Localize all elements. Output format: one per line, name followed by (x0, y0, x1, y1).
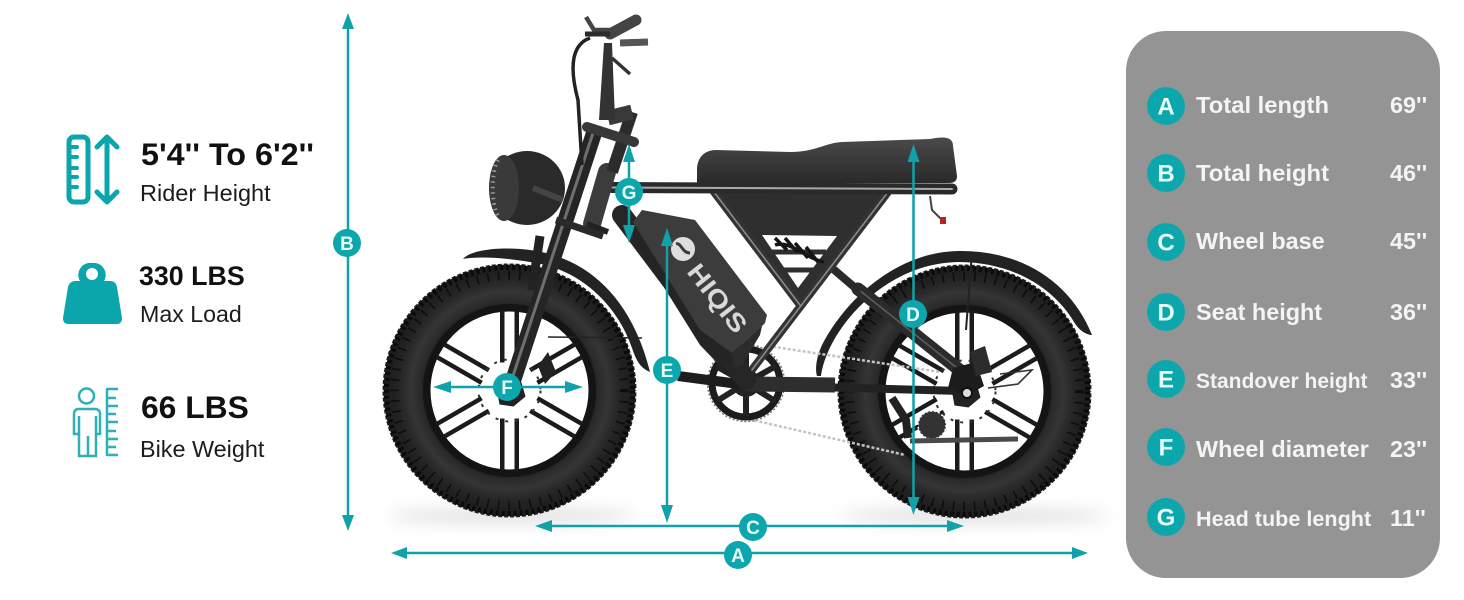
dimension E: standover height: E (661, 361, 673, 382)
row G: head tube length: Head tube lenght (1196, 506, 1371, 531)
rear fender (816, 251, 1092, 376)
fender stay (966, 252, 972, 330)
row F: wheel diameter: Wheel diameter (1196, 436, 1369, 462)
crank arm and pedal (678, 376, 746, 385)
row A: total length: Total length (1196, 92, 1329, 118)
battery brand text: HIQIS (681, 258, 753, 339)
dimension C: wheel base (535, 513, 964, 541)
row C: wheel base: C (1157, 230, 1175, 256)
dimension A: total length (391, 541, 1088, 569)
row D: seat height: Seat height (1196, 299, 1322, 325)
row G: head tube length: 11'' (1390, 505, 1426, 531)
row D: seat height: 36'' (1390, 299, 1427, 325)
row C: wheel base (1147, 223, 1427, 261)
bike weight value: 66 LBS (141, 389, 249, 425)
row B: total height: 46'' (1390, 160, 1427, 186)
row E: standover height: E (1158, 366, 1174, 394)
icon: ruler with arrows (69, 137, 117, 202)
front fender (463, 248, 650, 372)
front wheel (383, 264, 636, 517)
frame tubes (612, 188, 952, 380)
left spec: rider height (69, 136, 314, 206)
row A: total length (1147, 87, 1427, 125)
row D: seat height: D (1157, 300, 1175, 326)
left spec: max load (63, 261, 245, 327)
row C: wheel base: 45'' (1390, 228, 1427, 254)
row F: wheel diameter (1147, 428, 1427, 466)
row D: seat height (1147, 293, 1427, 331)
dimension C: wheel base: C (746, 518, 760, 539)
max load label: Max Load (140, 301, 242, 327)
row C: wheel base: Wheel base (1196, 228, 1325, 254)
battery logo (671, 237, 695, 261)
chainring (708, 344, 784, 422)
headlight (489, 151, 565, 225)
fork (509, 112, 642, 390)
row G: head tube length (1147, 498, 1426, 536)
rider height label: Rider Height (140, 180, 271, 206)
dimension D: seat height: D (906, 305, 920, 326)
row G: head tube length: G (1157, 504, 1175, 532)
row E: standover height: Standover height (1196, 370, 1368, 393)
left spec: bike weight (74, 388, 265, 462)
head tube (587, 172, 608, 232)
dimension G: head tube length (615, 144, 643, 243)
drivetrain and kickstand (892, 346, 1032, 441)
battery (625, 210, 767, 368)
row B: total height (1147, 154, 1427, 192)
dimension E: standover height (653, 228, 681, 523)
dimension F: wheel diameter (433, 373, 583, 401)
rear wheel (838, 265, 1091, 518)
row F: wheel diameter: 23'' (1390, 436, 1427, 462)
rear light (930, 196, 946, 224)
dimension D: seat height (899, 144, 927, 515)
frame plate with cutout (712, 192, 888, 305)
max load value: 330 LBS (139, 261, 245, 291)
chain (735, 346, 940, 455)
rear triangle (746, 268, 984, 398)
icon: weight (63, 263, 122, 324)
dimension G: head tube length: G (622, 183, 636, 204)
row E: standover height: 33'' (1390, 367, 1427, 393)
panel: dimensions table (1126, 31, 1440, 578)
icon: person with scale (74, 388, 118, 456)
row A: total length: A (1157, 94, 1175, 120)
row B: total height: Total height (1196, 160, 1329, 186)
bike weight label: Bike Weight (140, 436, 265, 462)
rider height value: 5'4'' To 6'2'' (141, 136, 314, 172)
dimension F: wheel diameter: F (501, 378, 513, 399)
row A: total length: 69'' (1390, 92, 1427, 118)
e-bike illustration (383, 17, 1092, 518)
row B: total height: B (1157, 160, 1175, 188)
dimension B: total height (333, 13, 361, 531)
handlebar and stem (573, 17, 648, 165)
seat (697, 137, 957, 183)
ground shadows (387, 509, 1110, 523)
dimension B: total height: B (340, 234, 354, 255)
row E: standover height (1147, 360, 1427, 398)
dimension A: total length: A (731, 546, 745, 567)
row F: wheel diameter: F (1159, 434, 1173, 462)
